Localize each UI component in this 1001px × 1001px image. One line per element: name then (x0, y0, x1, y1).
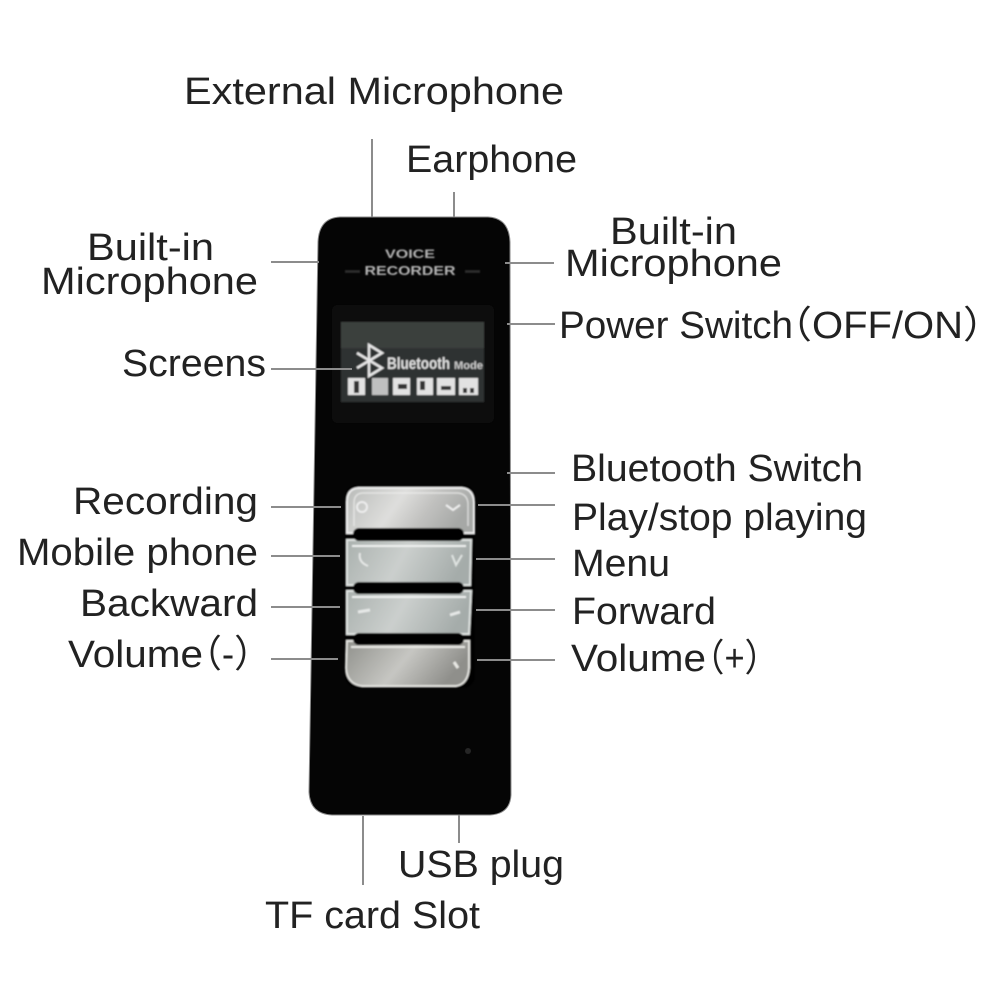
label: recording: Recording (73, 481, 258, 523)
brand label: VOICE (385, 247, 435, 261)
button group (345, 485, 475, 688)
label: screens: Screens (122, 343, 266, 385)
device body (309, 217, 511, 815)
label: power switch: Power Switch (559, 305, 793, 347)
label: power switch: （OFF/ON） (772, 305, 1001, 347)
label: built-in microphone left: Microphone (41, 261, 258, 303)
label: external microphone: External Microphone (184, 71, 564, 113)
label: built-in microphone left (41, 227, 258, 303)
label: earphone: Earphone (406, 139, 577, 181)
label: tf card slot: TF card Slot (265, 895, 480, 937)
button: volume (346, 641, 469, 686)
label: volume minus: （-） (185, 634, 271, 676)
screen icons (348, 378, 478, 395)
indicator light (465, 748, 471, 754)
label: backward: Backward (80, 583, 258, 625)
label: volume plus (571, 638, 779, 680)
button slots (353, 528, 464, 645)
label: mobile phone: Mobile phone (17, 532, 258, 574)
callout lines (271, 139, 555, 885)
label: volume minus (68, 634, 271, 676)
label: forward: Forward (572, 591, 716, 633)
microphone holes (345, 270, 480, 273)
label: built-in microphone right: Built-in (610, 211, 737, 253)
label: play/stop playing: Play/stop playing (572, 497, 867, 539)
label: volume minus: Volume (68, 634, 203, 676)
label: volume plus: Volume (571, 638, 706, 680)
label: built-in microphone right: Microphone (565, 243, 782, 285)
button: mobile phone / menu (347, 540, 471, 585)
button: recording / play (347, 488, 474, 533)
label: bluetooth switch: Bluetooth Switch (571, 448, 863, 490)
label: usb plug: USB plug (398, 844, 564, 886)
label: power switch (559, 305, 1001, 347)
screen (332, 305, 494, 423)
bluetooth symbol (357, 345, 382, 376)
brand label: RECORDER (364, 263, 456, 278)
label: built-in microphone left: Built-in (87, 227, 214, 269)
button: backward / forward (347, 591, 471, 634)
screen: Mode (454, 360, 483, 372)
recorder device (309, 217, 511, 815)
brand label (364, 247, 456, 278)
label: built-in microphone right (565, 211, 782, 285)
screen mode text: Bluetooth (387, 354, 450, 373)
label: volume plus: （+） (690, 638, 779, 680)
label: menu: Menu (572, 543, 670, 585)
